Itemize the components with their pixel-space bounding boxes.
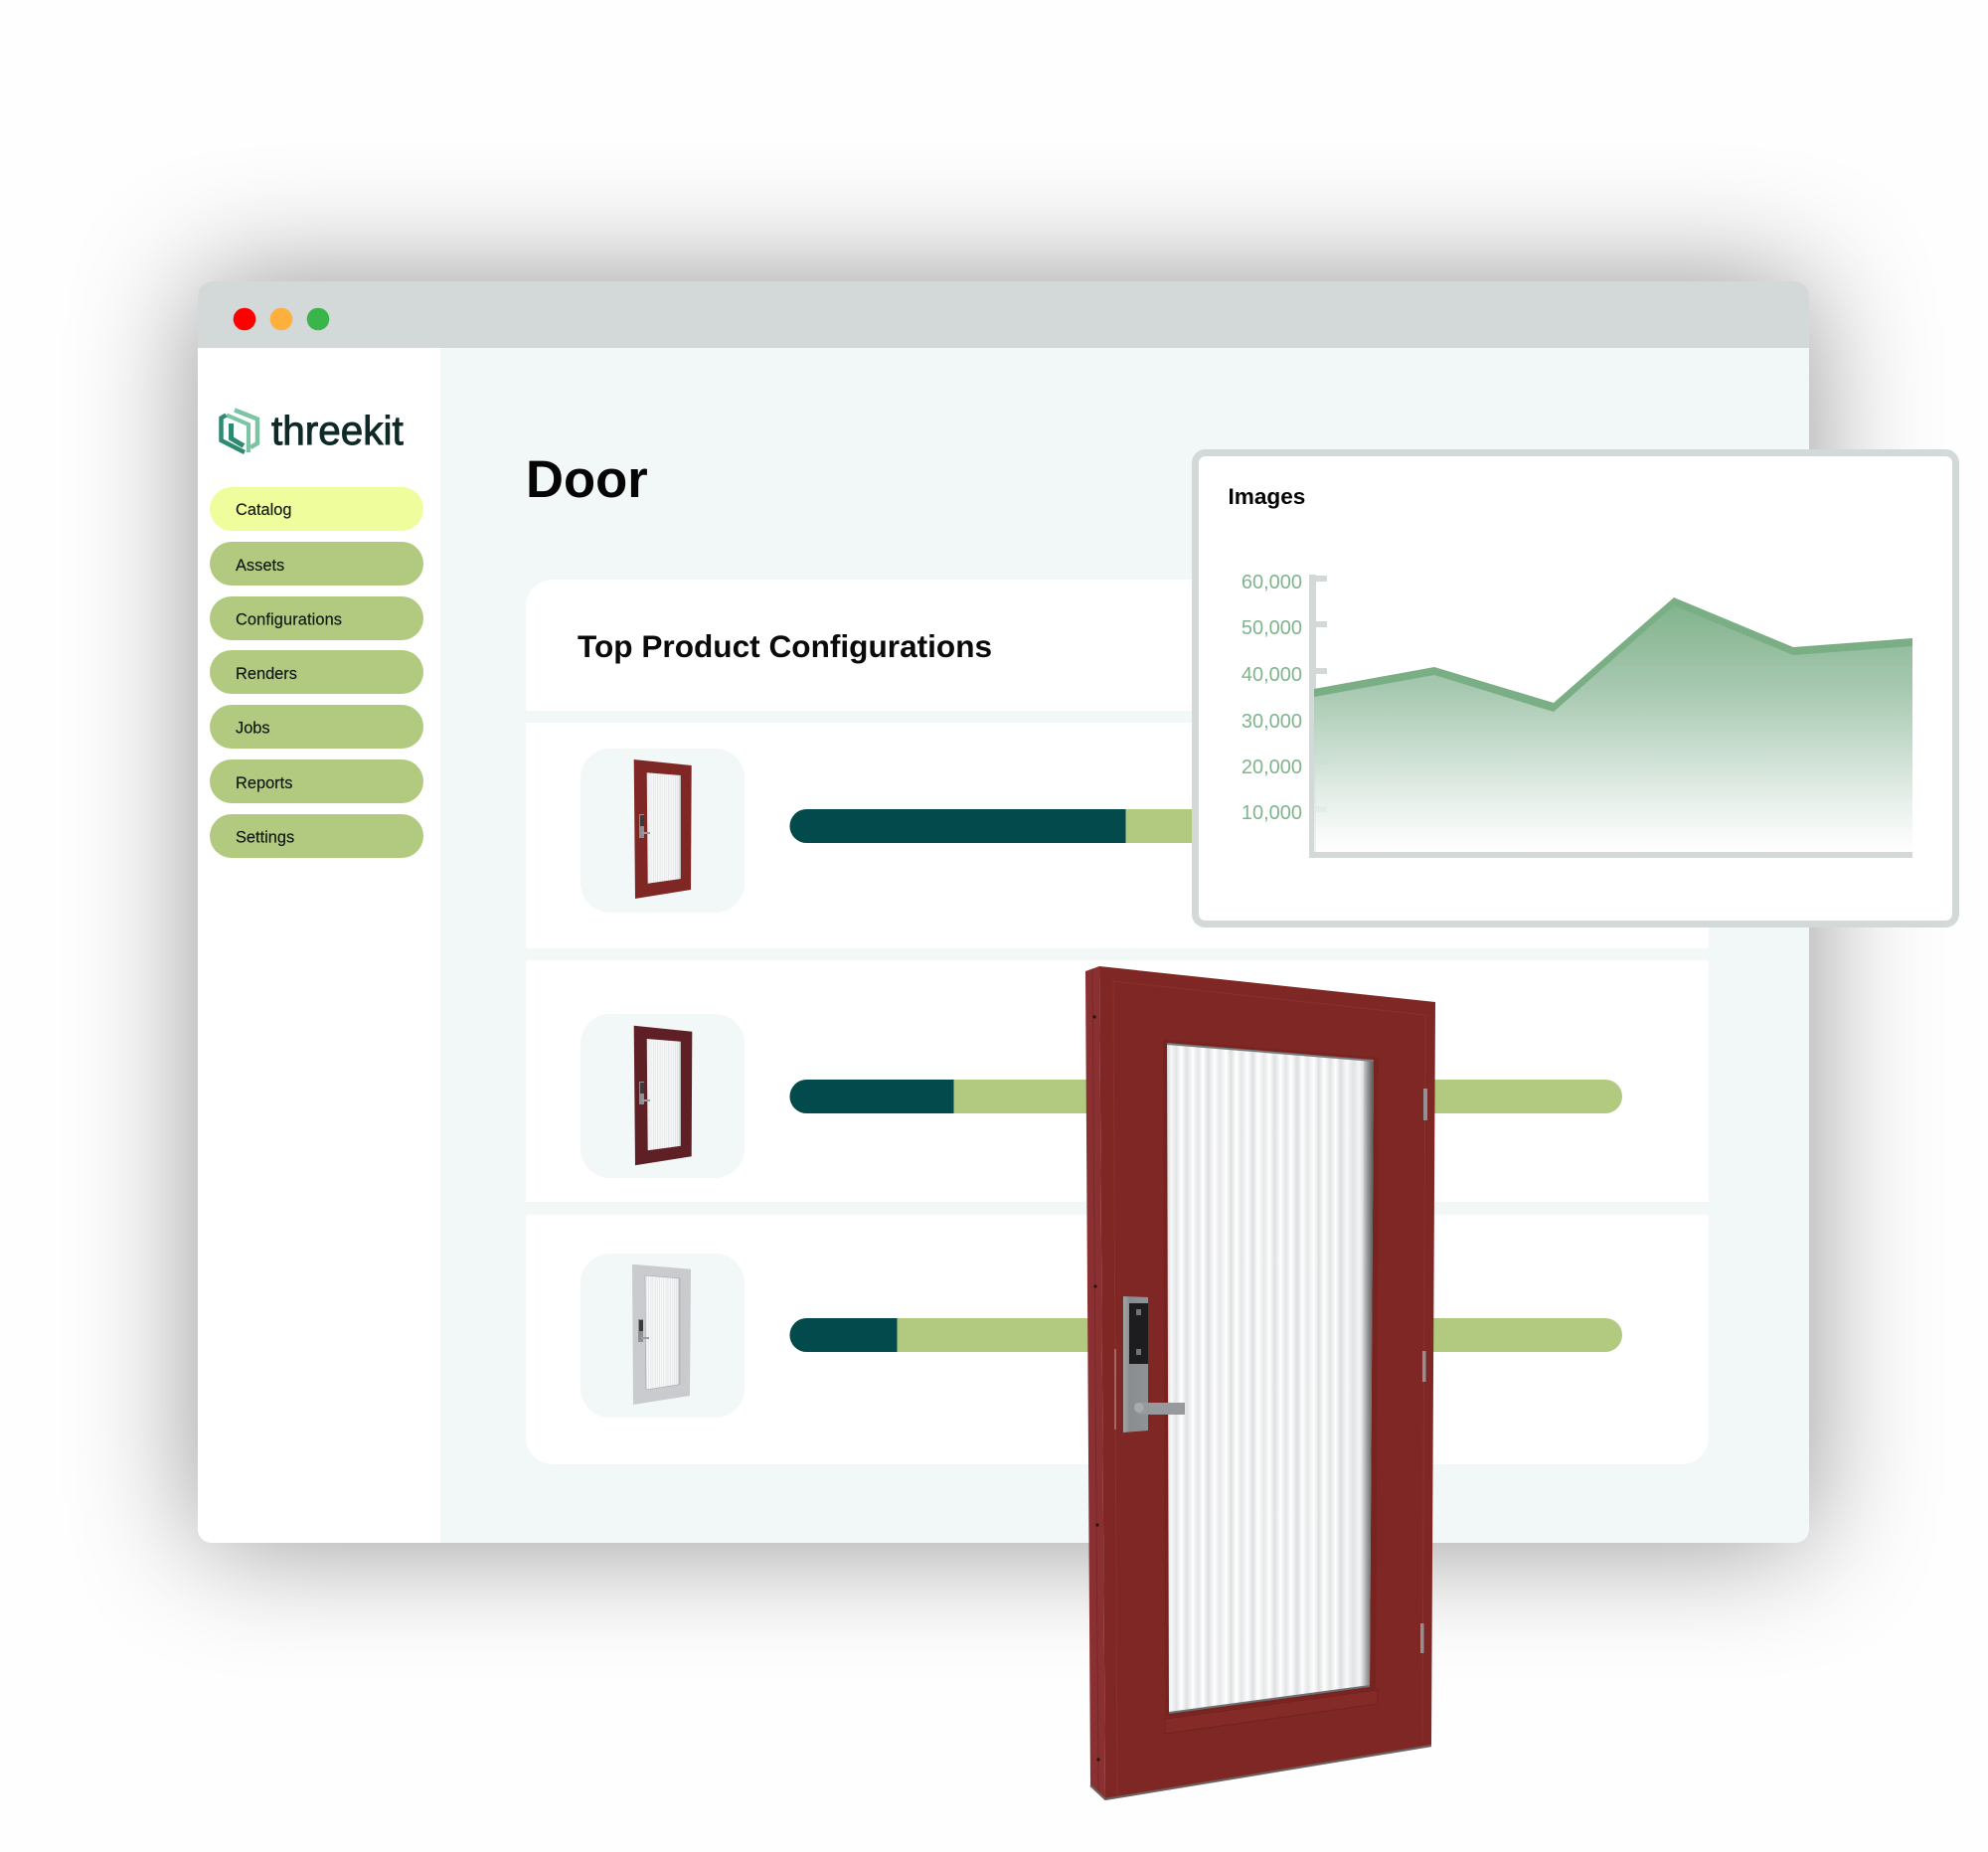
nav item: Jobs <box>210 705 423 749</box>
y axis labels: 40,000 <box>1242 664 1302 686</box>
window control: maximize <box>307 308 329 330</box>
wordmark: threekit <box>271 408 404 453</box>
nav item: Renders: Renders <box>236 665 297 683</box>
door side face <box>1085 966 1105 1799</box>
nav item: Settings <box>210 814 423 858</box>
axes <box>1309 575 1912 858</box>
nav item: Reports: Reports <box>236 774 292 792</box>
nav item: Assets: Assets <box>236 557 284 575</box>
nav item: Catalog <box>210 487 423 531</box>
y axis labels: 60,000 <box>1242 572 1302 593</box>
main content background <box>440 348 1809 1543</box>
chart title: Images <box>1229 484 1305 509</box>
nav item: Settings: Settings <box>236 829 294 847</box>
y axis labels <box>1242 572 1302 824</box>
thumbnail: dark red door <box>580 1014 745 1178</box>
row 1 <box>580 749 1622 913</box>
hero door <box>1085 966 1435 1799</box>
thumbnail: grey door <box>580 1254 745 1418</box>
window control: minimize <box>270 308 292 330</box>
row 2 <box>580 1014 1622 1178</box>
card heading: Top Product Configurations <box>578 628 992 664</box>
threekit logo <box>221 408 404 453</box>
nav item: Reports <box>210 759 423 803</box>
panel: top product configurations <box>526 580 1709 1464</box>
title bar <box>198 281 1809 348</box>
nav item: Configurations: Configurations <box>236 610 342 628</box>
door frame lines <box>1113 981 1425 1795</box>
door front face <box>1099 966 1435 1799</box>
nav item: Configurations <box>210 596 423 640</box>
panel frame <box>1195 453 1956 925</box>
window control: close <box>234 308 255 330</box>
glass edge shading <box>1361 1060 1374 1687</box>
smart lock <box>1115 1296 1185 1432</box>
door screws <box>1092 1015 1100 1762</box>
window recess <box>1163 1040 1379 1717</box>
y axis labels: 20,000 <box>1242 757 1302 778</box>
area chart <box>1314 597 1912 852</box>
hinges <box>1420 1089 1427 1653</box>
progress bar 2 <box>789 1080 1622 1113</box>
card background <box>526 580 1709 1464</box>
y axis labels: 10,000 <box>1242 802 1302 824</box>
door bottom edge <box>1090 1746 1431 1799</box>
nav item: Jobs: Jobs <box>236 720 270 738</box>
nav item: Renders <box>210 650 423 694</box>
door sill <box>1165 1690 1378 1734</box>
row 3 <box>580 1254 1622 1418</box>
browser window <box>198 281 1809 1543</box>
progress bar 3 <box>789 1318 1622 1352</box>
panel: images chart <box>1195 453 1956 925</box>
thumbnail: red door <box>580 749 745 913</box>
frosted glass <box>1167 1044 1374 1713</box>
sidebar navigation <box>210 487 423 858</box>
page heading: Door <box>526 450 648 509</box>
y axis labels: 30,000 <box>1242 711 1302 733</box>
nav item: Assets <box>210 542 423 586</box>
icon: threekit hexagon <box>221 410 257 452</box>
sidebar <box>198 348 440 1543</box>
nav item: Catalog: Catalog <box>236 501 292 519</box>
progress bar 1 <box>789 809 1622 843</box>
row separators <box>526 711 1709 1215</box>
y axis labels: 50,000 <box>1242 617 1302 639</box>
browser window shadow <box>198 281 1809 1543</box>
